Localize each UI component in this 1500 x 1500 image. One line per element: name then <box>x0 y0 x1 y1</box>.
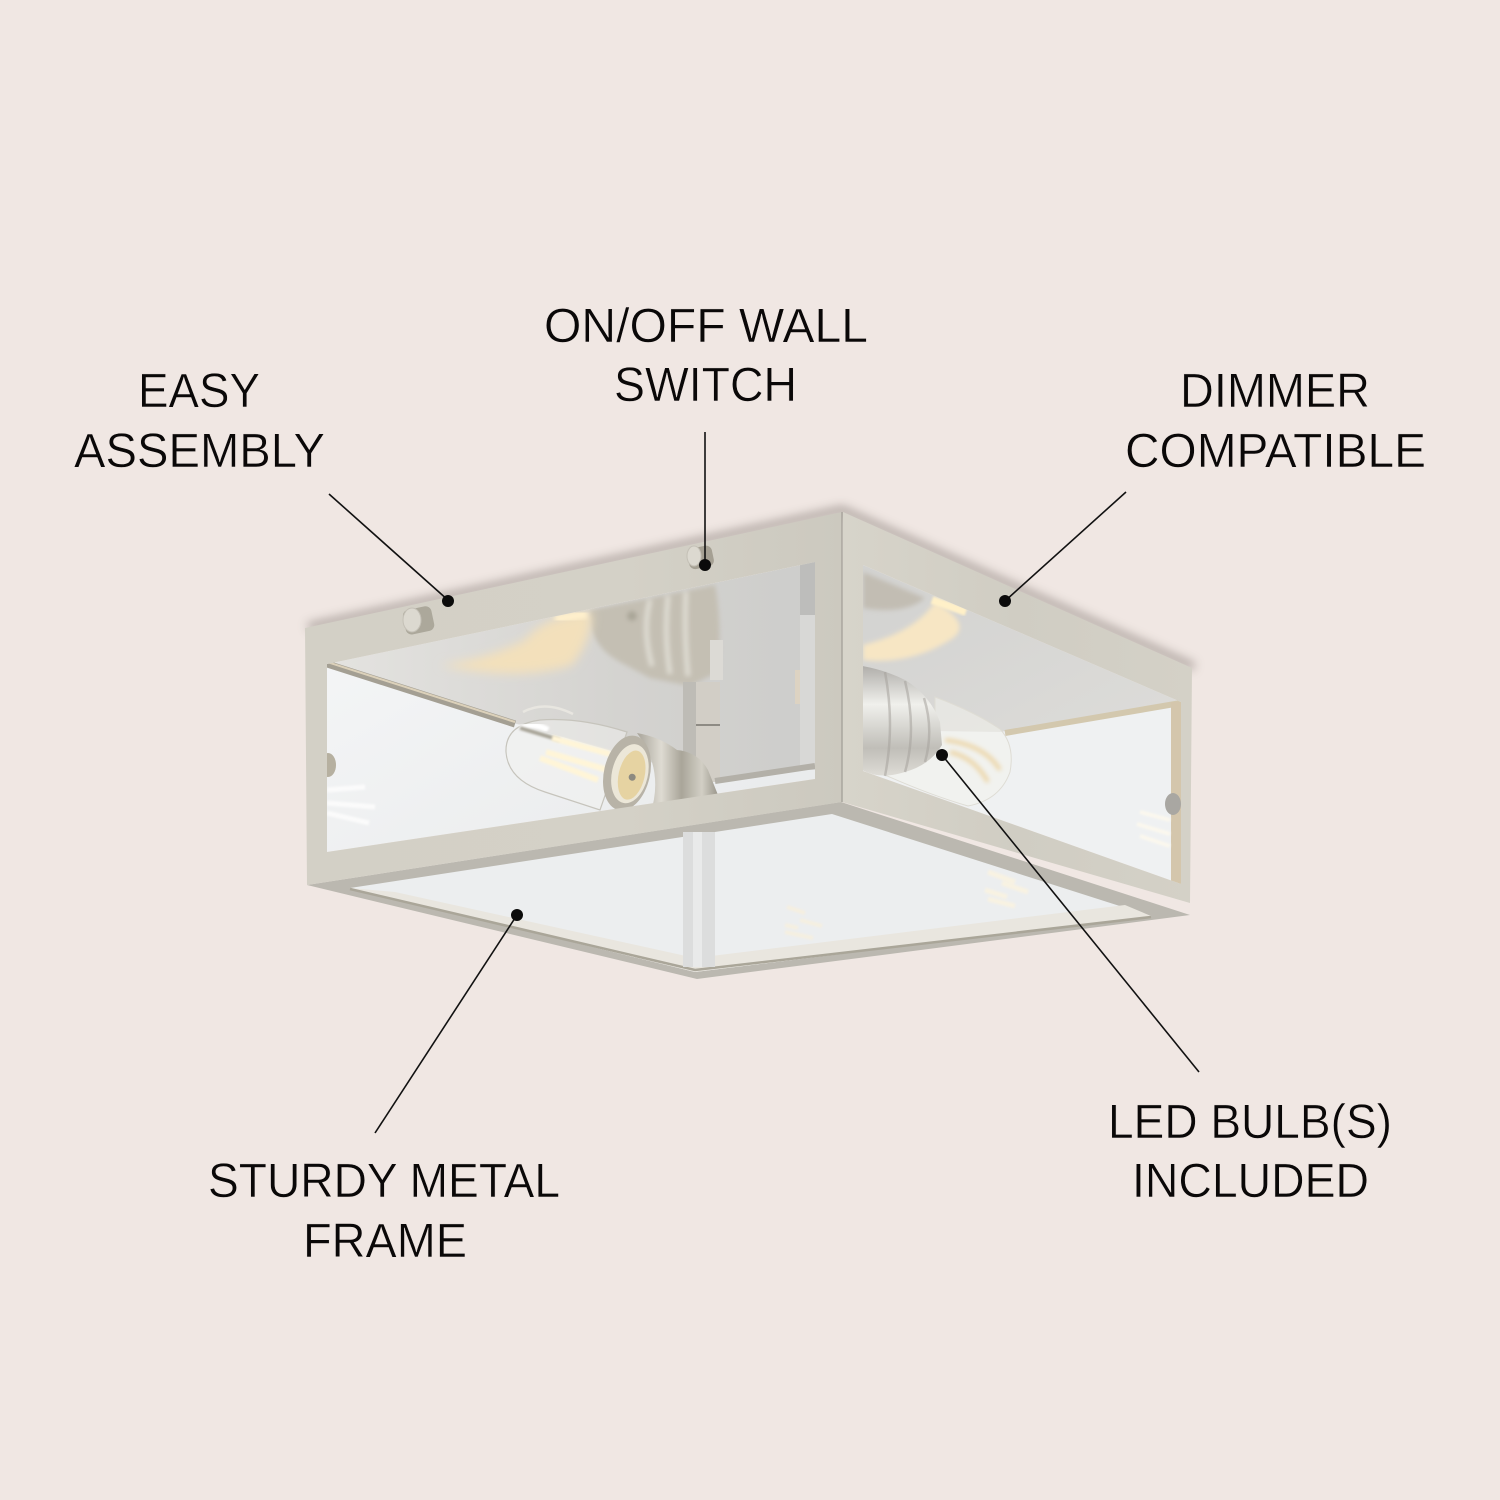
socket <box>862 666 942 776</box>
reflected socket <box>863 572 925 610</box>
filaments <box>540 738 610 780</box>
callout line: on/off wall switch <box>699 432 711 571</box>
label: dimmer compatible <box>1125 365 1426 478</box>
label: easy assembly <box>74 365 325 478</box>
ceiling shadow <box>308 510 1194 667</box>
label: on/off wall switch: SWITCH <box>614 359 797 412</box>
label: sturdy metal frame: FRAME <box>303 1215 467 1268</box>
label: easy assembly: EASY <box>138 365 260 418</box>
label: LED bulbs included: LED BULB(S) <box>1108 1096 1392 1149</box>
left glass panel <box>320 560 815 852</box>
label: sturdy metal frame: STURDY METAL <box>208 1155 560 1208</box>
bottom glass panel <box>307 802 1190 979</box>
label: on/off wall switch: ON/OFF WALL <box>544 300 868 353</box>
warm glow <box>863 602 960 661</box>
callout line: easy assembly <box>329 494 454 607</box>
label: dimmer compatible: DIMMER <box>1180 365 1370 418</box>
bulb glass <box>885 697 1011 806</box>
label: LED bulbs included: INCLUDED <box>1132 1155 1369 1208</box>
metal frame: right face <box>842 512 1192 903</box>
left bulb <box>506 706 718 815</box>
label: on/off wall switch <box>544 300 868 412</box>
reflected rear socket <box>590 585 719 686</box>
label: LED bulbs included <box>1108 1096 1392 1208</box>
callout line: sturdy metal frame <box>375 909 523 1133</box>
top knob left <box>402 605 435 636</box>
rear rod <box>1005 703 1181 733</box>
label: dimmer compatible: COMPATIBLE <box>1125 425 1426 478</box>
bulb collar <box>596 731 658 815</box>
label: easy assembly: ASSEMBLY <box>74 425 325 478</box>
rear post <box>683 640 723 782</box>
label: sturdy metal frame <box>208 1155 560 1268</box>
reflections <box>327 787 375 823</box>
side screw <box>1165 793 1181 815</box>
side screw <box>327 753 336 777</box>
reflections <box>1137 812 1170 846</box>
glass <box>506 720 627 810</box>
metal frame: left face <box>305 512 842 885</box>
warm glow <box>440 612 592 674</box>
callout line: LED bulbs <box>936 749 1199 1072</box>
rear rod <box>327 664 515 724</box>
right glass panel <box>862 565 1181 886</box>
ceiling light fixture <box>305 510 1194 979</box>
far post <box>795 560 815 770</box>
top knob right <box>686 545 715 570</box>
callout line: dimmer compatible <box>999 492 1126 607</box>
infographic: ceiling light features <box>74 307 1424 1257</box>
tan glass edge <box>1171 702 1181 886</box>
socket <box>637 733 718 815</box>
